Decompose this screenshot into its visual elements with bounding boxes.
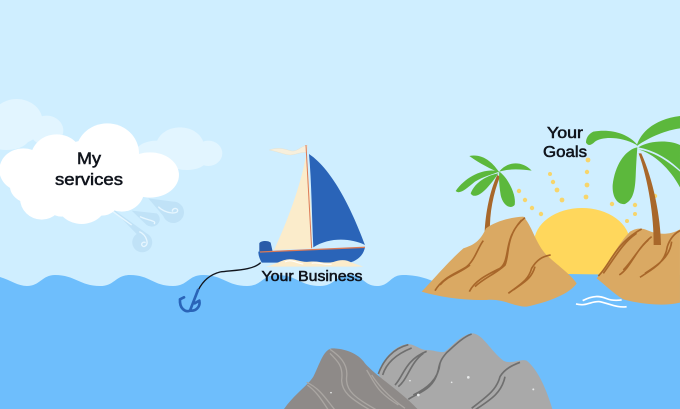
label: Your Goals: Goals [543,144,587,161]
mast [306,145,312,248]
foam [265,259,363,267]
sun rays [517,158,657,223]
cloud shape [0,123,179,224]
front cloud with label [0,123,179,224]
foam white lines [285,261,332,264]
cream sail [274,155,312,250]
right island [586,116,680,305]
anchor hook [180,290,200,311]
water ripple [576,297,627,307]
back clouds [0,99,222,170]
front dark rock [283,348,418,409]
right island sand mound [597,229,680,305]
motor [259,241,273,252]
left island [422,156,577,307]
flag [269,145,307,155]
label: Your Business: Your Business [262,268,362,285]
right island streaks [598,229,680,277]
rocks [283,333,553,409]
sea with waves [0,272,680,409]
label: Your Goals [543,125,587,161]
rope [198,263,261,290]
hull [258,247,365,263]
hull stripe [260,247,365,252]
front rock streaks [307,349,405,409]
label: My services: My [77,149,102,168]
label: My services [55,149,123,189]
back grey rock [378,333,553,409]
right palm trunk [639,153,661,245]
left palm trunk [485,175,500,233]
left island streaks [435,218,551,293]
blue sail [309,154,365,247]
boat [258,145,365,267]
sun [534,208,630,278]
label: My services: services [55,170,123,189]
wind swirls [111,198,184,252]
left island sand mound [422,217,577,307]
right palm fronds [586,116,680,204]
label: Your Goals: Your [547,125,583,142]
back rock streaks [378,334,520,409]
rock speckles [330,376,534,396]
left palm fronds [456,156,532,207]
